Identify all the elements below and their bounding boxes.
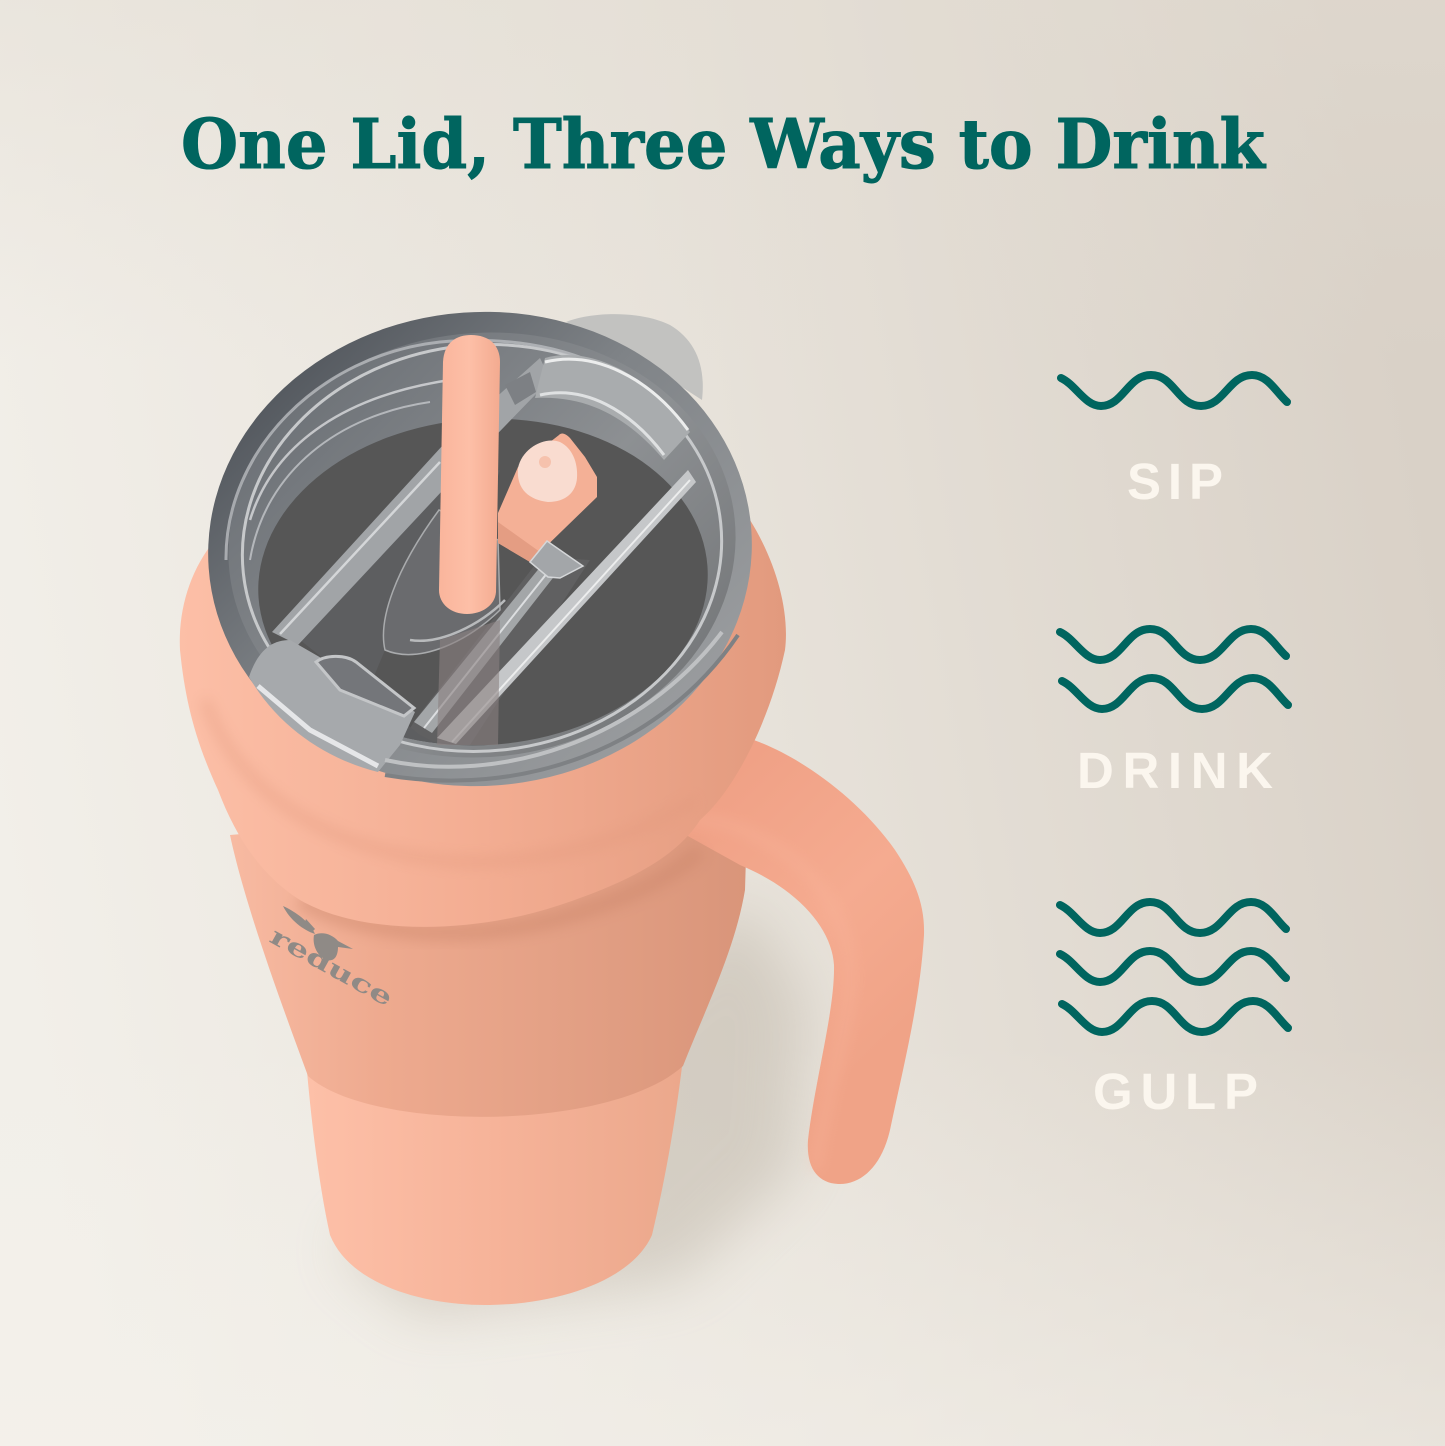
label: SIP: SIP	[1127, 453, 1223, 510]
icon: three waves	[1060, 902, 1288, 1032]
logo	[265, 906, 398, 1012]
tumbler lower base	[306, 1050, 684, 1305]
icon: one wave	[1061, 375, 1287, 406]
collar undershadow	[300, 850, 700, 933]
lid	[208, 312, 752, 786]
title: One Lid, Three Ways to Drink	[181, 105, 1267, 185]
tumbler collar	[180, 520, 786, 927]
hinge clip	[530, 541, 583, 578]
sip group	[1061, 375, 1287, 510]
gasket base	[498, 434, 597, 562]
lid tab	[566, 314, 703, 400]
lid outer rim	[192, 294, 768, 804]
interior dark floor	[247, 404, 719, 760]
icon: two waves	[1060, 629, 1288, 709]
reflection stripe	[437, 620, 500, 745]
lid rails	[300, 470, 590, 745]
label: GULP: GULP	[1093, 1063, 1258, 1120]
drink group	[1060, 629, 1288, 799]
slider right rail	[437, 470, 696, 744]
straw recess	[383, 510, 500, 654]
label: DRINK: DRINK	[1077, 742, 1273, 799]
front latch	[249, 640, 415, 772]
lid glass ring	[207, 308, 757, 782]
silicone stopper	[518, 440, 577, 502]
top hinge glass	[535, 355, 690, 460]
straw	[439, 335, 500, 614]
cast shadow	[340, 900, 805, 1315]
slider left rail	[272, 358, 548, 645]
gulp group	[1060, 902, 1288, 1120]
tumbler product photo	[180, 294, 924, 1315]
tumbler upper body	[230, 790, 748, 1117]
logo mark	[283, 906, 353, 960]
slider inner rail	[414, 566, 556, 733]
bottom rim	[385, 632, 722, 767]
handle	[686, 738, 924, 1184]
logo wordmark: reduce	[265, 921, 398, 1012]
